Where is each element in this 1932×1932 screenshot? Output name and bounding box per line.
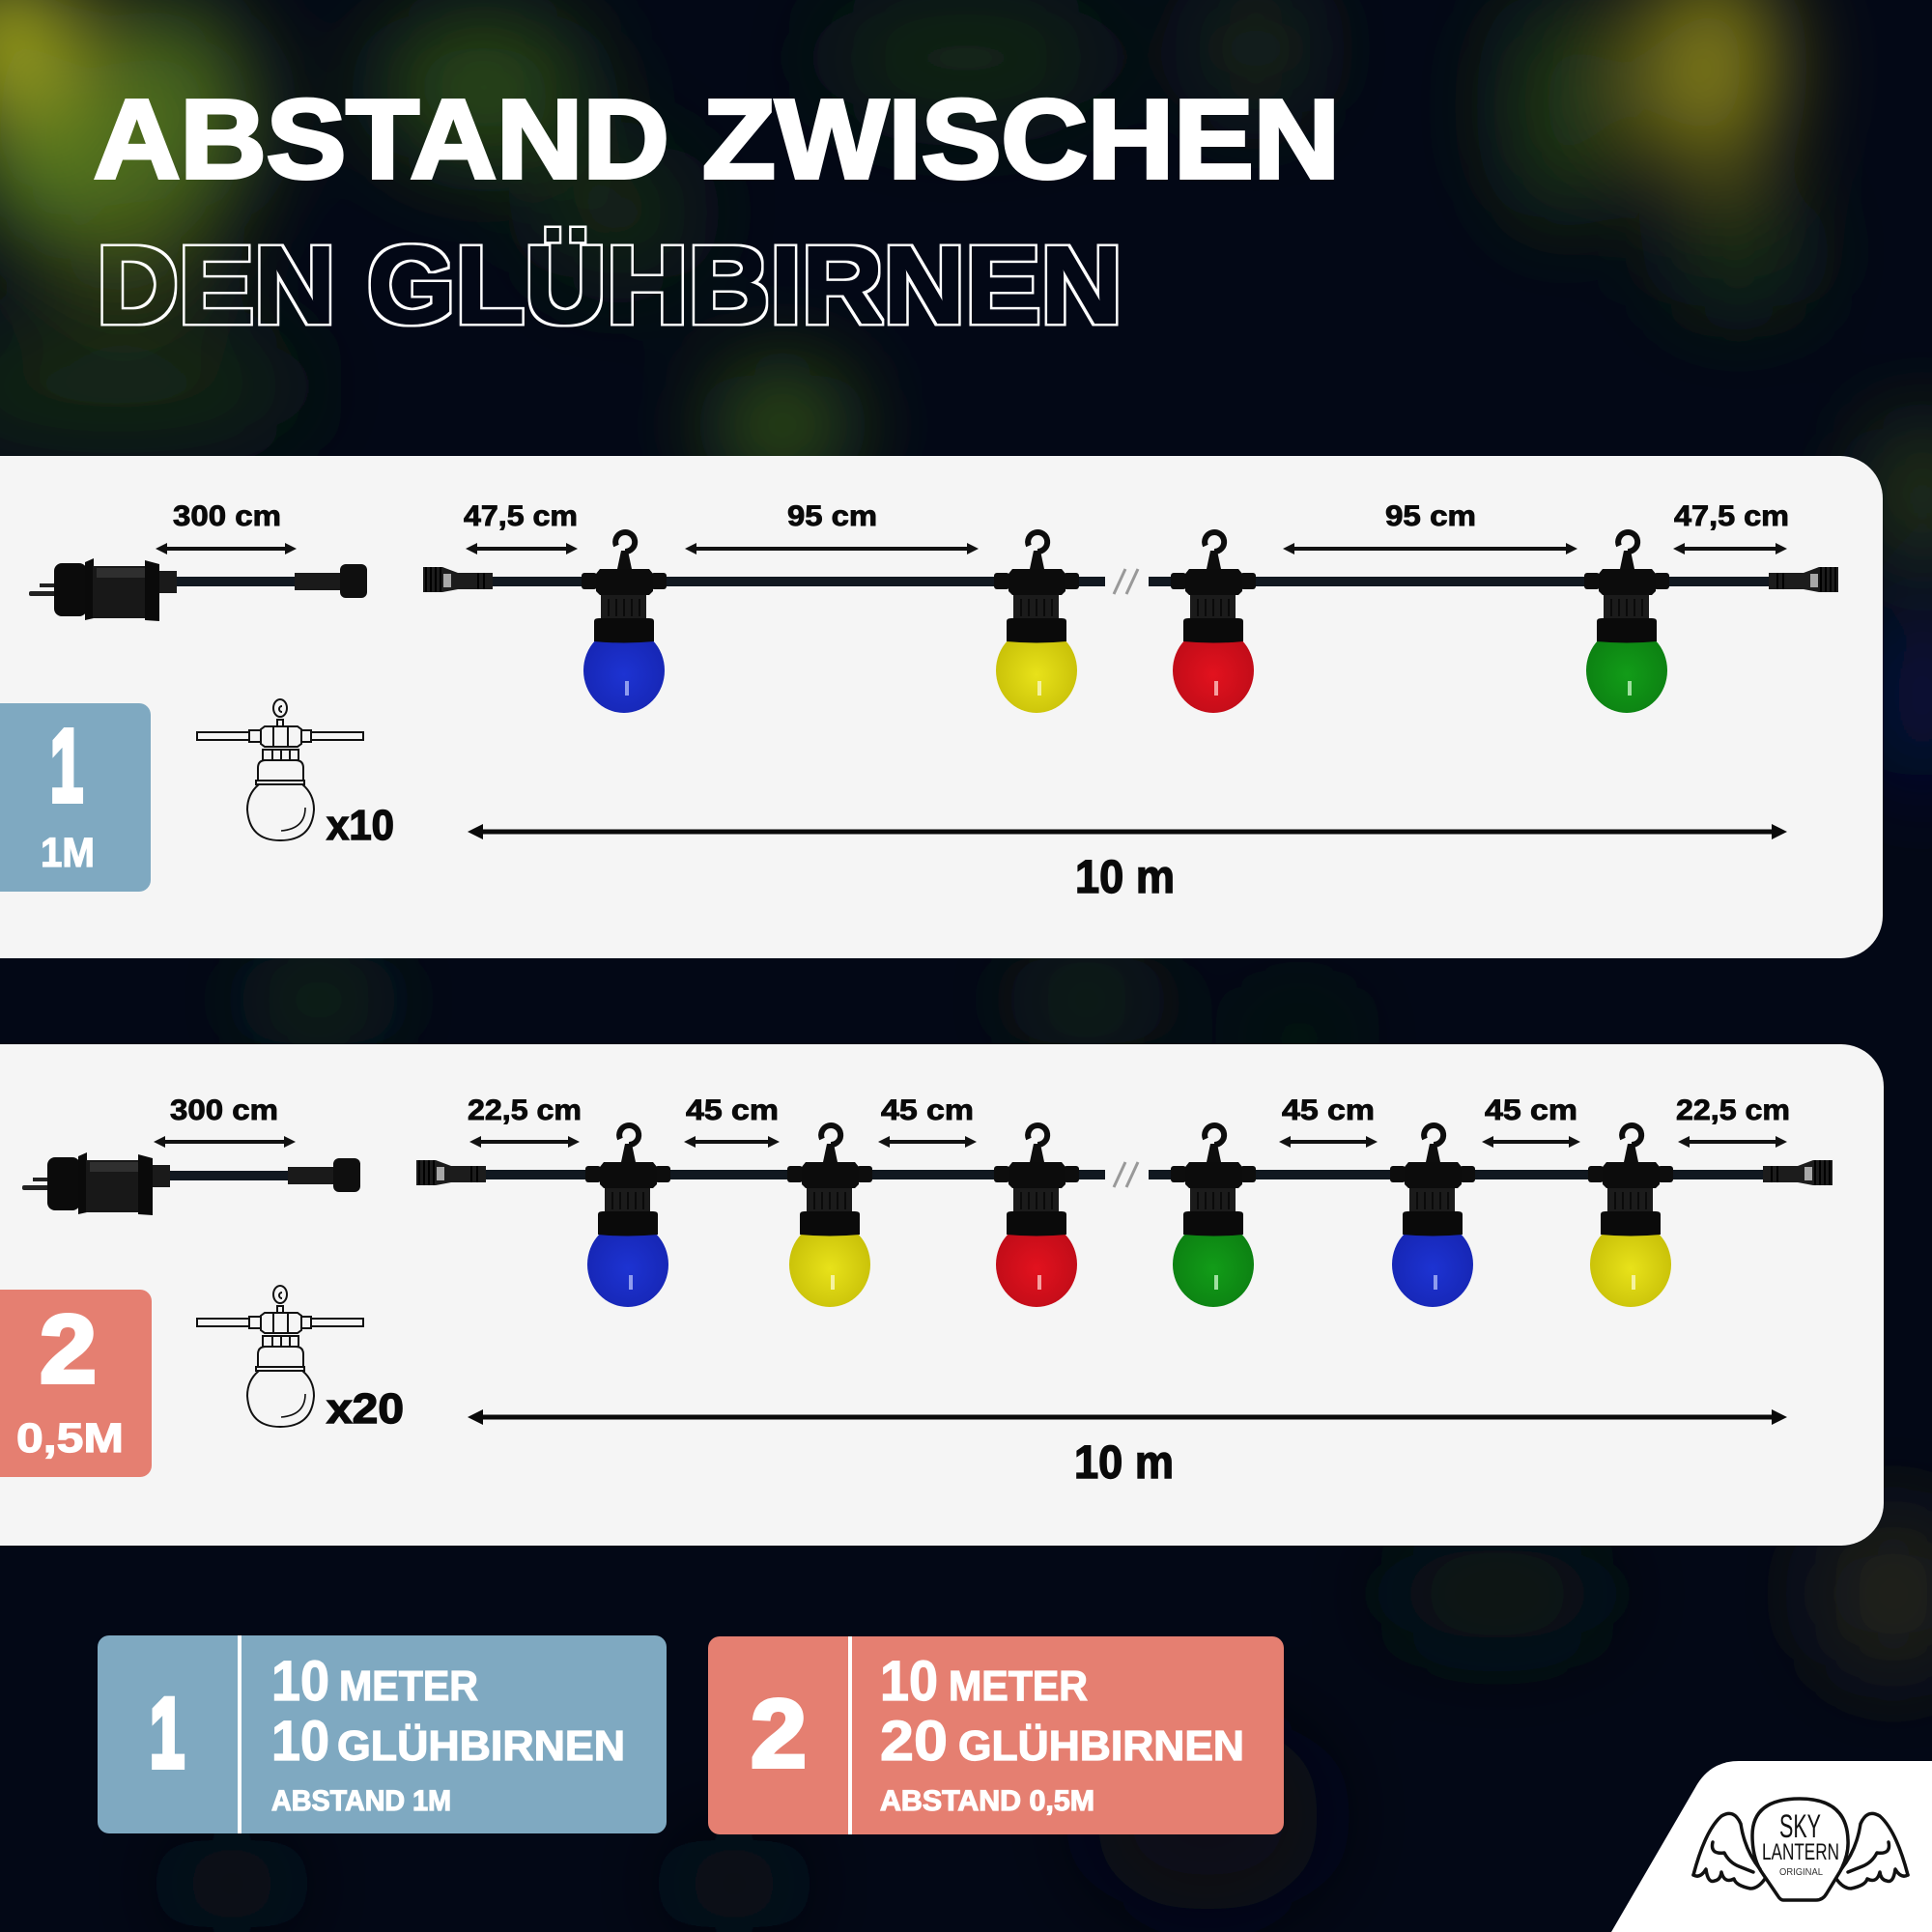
badge 1: 1 (50, 709, 83, 823)
summary box 1: 1 (150, 1678, 185, 1788)
logo corner: Sky Lantern Original: SKY (1779, 1808, 1821, 1845)
bulb: green (1584, 532, 1669, 713)
bulb: yellow (994, 532, 1079, 713)
badge 1: 1M (41, 830, 95, 876)
outline bulb icon x20 (197, 1286, 404, 1433)
title line 2 outlined: DEN GLÜHBIRNEN (97, 224, 1122, 346)
outline bulb icon x10 (197, 699, 394, 849)
summary box 2: 10 (880, 1650, 938, 1713)
logo corner: Sky Lantern Original: ORIGINAL (1779, 1867, 1823, 1878)
total length arrow 10 m (468, 1409, 1787, 1489)
badge 1 (0, 703, 151, 892)
total length arrow 10 m: 10 m (1075, 852, 1175, 903)
total length arrow 10 m: 10 m (1074, 1437, 1174, 1489)
plug with 300 cm lead: 300 cm (170, 1094, 278, 1126)
spacing labels 1: 47,5 cm (1674, 500, 1789, 532)
spacing labels 1: 47,5 cm (464, 500, 578, 532)
summary box 1: GLÜHBIRNEN (337, 1722, 625, 1770)
bulb: green (1171, 1125, 1256, 1307)
summary box 2: ABSTAND 0,5M (880, 1785, 1094, 1817)
total length arrow 10 m (468, 824, 1787, 903)
light string 1 (423, 532, 1838, 713)
bulb: yellow (1588, 1125, 1673, 1307)
summary box 2 (708, 1636, 1284, 1834)
summary box 1: METER (339, 1662, 478, 1710)
bulb: red (1171, 532, 1256, 713)
summary box 1 (98, 1635, 667, 1833)
spacing labels 2 (468, 1094, 1790, 1148)
bulb: yellow (787, 1125, 872, 1307)
spacing labels 2: 45 cm (881, 1094, 974, 1126)
logo corner: Sky Lantern Original: LANTERN (1762, 1839, 1839, 1865)
spacing labels 1 (464, 500, 1789, 554)
summary box 1: ABSTAND 1M (271, 1785, 451, 1817)
bulb: blue (585, 1125, 670, 1307)
badge 2 (0, 1290, 152, 1477)
spacing labels 2: 45 cm (1282, 1094, 1375, 1126)
summary box 2: METER (949, 1662, 1088, 1710)
spacing labels 1: 95 cm (787, 500, 877, 532)
outline bulb icon x10: x10 (327, 802, 394, 849)
bulb: blue (582, 532, 667, 713)
summary box 1: 10 (271, 1650, 329, 1713)
panel 1: 1 m spacing (0, 456, 1883, 958)
panel 2: 0,5 m spacing (0, 1044, 1884, 1546)
plug with 300 cm lead: 300 cm (173, 500, 281, 532)
light string 2 (416, 1125, 1833, 1307)
badge 2: 0,5M (16, 1415, 124, 1462)
spacing labels 2: 22,5 cm (468, 1094, 582, 1126)
summary box 2: 20 (880, 1710, 948, 1773)
outline bulb icon x20: x20 (327, 1385, 404, 1433)
summary box 2: GLÜHBIRNEN (958, 1722, 1244, 1770)
spacing labels 2: 22,5 cm (1676, 1094, 1790, 1126)
bulb: red (994, 1125, 1079, 1307)
bulb: blue (1390, 1125, 1475, 1307)
logo corner: Sky Lantern Original (1611, 1761, 1932, 1932)
badge 2: 2 (40, 1295, 97, 1404)
plug with 300 cm lead (22, 1094, 360, 1215)
title line 1: ABSTAND ZWISCHEN (94, 76, 1340, 202)
spacing labels 2: 45 cm (686, 1094, 779, 1126)
spacing labels 1: 95 cm (1385, 500, 1476, 532)
spacing labels 2: 45 cm (1485, 1094, 1577, 1126)
summary box 2: 2 (751, 1680, 807, 1788)
plug with 300 cm lead (29, 500, 367, 621)
summary box 1: 10 (271, 1710, 329, 1773)
